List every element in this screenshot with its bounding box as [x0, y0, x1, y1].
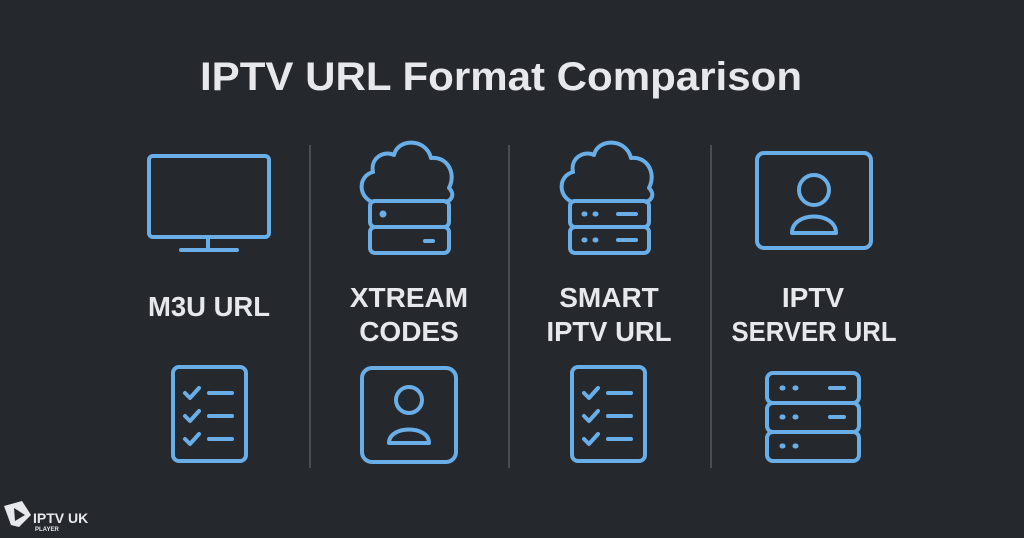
icon: checklist	[173, 367, 246, 461]
column: Xtream Codes: CODES	[359, 316, 459, 347]
icon: cloud server	[562, 143, 652, 253]
column: Xtream Codes	[350, 143, 468, 462]
icon: cloud server	[362, 143, 452, 253]
logo: PLAYER	[35, 527, 59, 533]
icon: checklist	[572, 367, 645, 461]
icon: user box	[757, 153, 871, 248]
logo: IPTV UK	[33, 510, 88, 526]
label: IPTV Server URL: IPTV	[782, 282, 844, 313]
label: Smart IPTV URL: SMART	[559, 282, 659, 313]
logo	[4, 501, 88, 533]
column: IPTV Server URL: SERVER URL	[732, 316, 896, 347]
icon: TV	[149, 156, 269, 250]
label: M3U URL: M3U URL	[148, 291, 270, 322]
icon: user box	[362, 368, 456, 462]
icon: server stack	[767, 373, 859, 461]
column: IPTV Server URL	[732, 153, 896, 461]
column: M3U URL	[148, 156, 270, 461]
column: Smart IPTV URL: IPTV URL	[546, 316, 672, 347]
title: IPTV URL Format Comparison	[200, 55, 802, 99]
column: Smart IPTV URL	[546, 143, 672, 461]
label: Xtream Codes: XTREAM	[350, 282, 468, 313]
